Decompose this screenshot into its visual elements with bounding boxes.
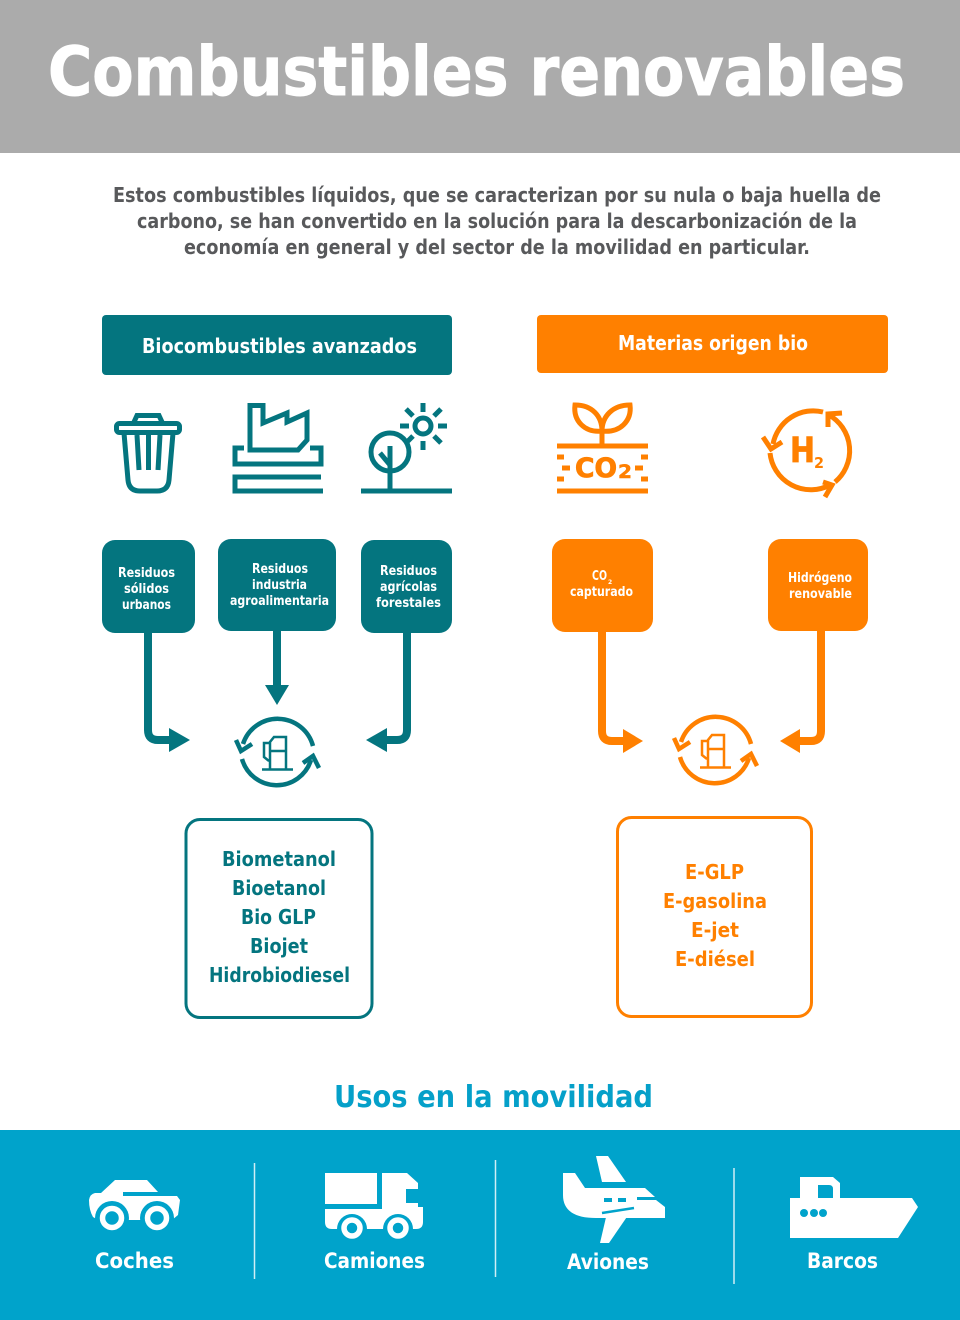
heading: materias origen bio: Materias origen bio bbox=[618, 331, 808, 355]
box: residuos agricolas forestales: agrícolas bbox=[380, 579, 437, 595]
box: biofuels list: Hidrobiodiesel bbox=[209, 963, 350, 987]
box: e-fuels list bbox=[618, 818, 812, 1016]
box: residuos industria agroalimentaria: industria bbox=[252, 577, 307, 593]
icon: car bbox=[89, 1180, 181, 1239]
box: residuos industria agroalimentaria: agroalimentaria bbox=[230, 593, 329, 609]
box: residuos industria agroalimentaria bbox=[218, 539, 336, 631]
box: biofuels list: Biojet bbox=[250, 934, 308, 958]
box: e-fuels list: E-diésel bbox=[675, 947, 755, 971]
arrow: CO2 to pump bbox=[602, 632, 643, 753]
box: biofuels list bbox=[186, 820, 372, 1018]
icon: truck bbox=[325, 1173, 423, 1244]
icon: H2 cycle: H bbox=[790, 431, 815, 471]
box: residuos agricolas forestales bbox=[361, 540, 452, 633]
box: residuos solidos urbanos: urbanos bbox=[122, 597, 171, 613]
label: barcos: Barcos bbox=[807, 1249, 878, 1273]
icon: tree and sun bbox=[361, 403, 452, 491]
icon: H2 cycle bbox=[763, 411, 850, 497]
intro paragraph: Estos combustibles líquidos, que se caracterizan por su nula o baja huella de bbox=[113, 183, 881, 207]
icon: CO2 plant: 2 bbox=[618, 461, 632, 483]
intro paragraph: carbono, se han convertido en la solución para la descarbonización de la bbox=[137, 209, 857, 233]
label: aviones: Aviones bbox=[567, 1250, 649, 1274]
box: hidrogeno renovable: Hidrógeno bbox=[788, 571, 852, 586]
box: residuos industria agroalimentaria: Residuos bbox=[252, 561, 308, 577]
box: residuos agricolas forestales: Residuos bbox=[380, 563, 437, 579]
heading: materias origen bio bbox=[537, 315, 888, 373]
intro paragraph: economía en general y del sector de la movilidad en particular. bbox=[184, 235, 810, 259]
icon: H2 cycle: 2 bbox=[814, 454, 824, 472]
box: biofuels list: Biometanol bbox=[222, 847, 336, 871]
box: e-fuels list: E-GLP bbox=[685, 860, 744, 884]
icon: trash can bbox=[116, 416, 180, 491]
icon: CO2 plant bbox=[557, 405, 648, 491]
panel: biocombustibles avanzados bbox=[102, 315, 452, 1018]
icon: CO2 plant: CO bbox=[575, 453, 617, 484]
label: coches: Coches bbox=[95, 1249, 174, 1273]
box: CO2 capturado bbox=[552, 539, 653, 632]
box: CO2 capturado: capturado bbox=[570, 585, 633, 600]
box: hidrogeno renovable: renovable bbox=[789, 587, 852, 602]
box: e-fuels list: E-jet bbox=[691, 918, 739, 942]
arrow: left to pump bbox=[148, 633, 190, 752]
box: CO2 capturado: 2 bbox=[608, 579, 612, 586]
icon: boat bbox=[790, 1177, 918, 1238]
header banner bbox=[0, 0, 960, 153]
heading: usos en la movilidad: Usos en la movilidad bbox=[334, 1080, 653, 1115]
box: residuos solidos urbanos: Residuos bbox=[118, 565, 175, 581]
box: e-fuels list: E-gasolina bbox=[663, 889, 767, 913]
arrow: hydrogen to pump bbox=[780, 631, 821, 753]
panel: mobility uses band bbox=[0, 1130, 960, 1320]
box: CO2 capturado: CO bbox=[592, 569, 607, 584]
box: residuos solidos urbanos: sólidos bbox=[124, 581, 169, 597]
box: biofuels list: Bio GLP bbox=[241, 905, 316, 929]
icon: fuel pump cycle teal bbox=[236, 719, 319, 785]
intro paragraph bbox=[113, 183, 881, 259]
heading: biocombustibles avanzados bbox=[102, 315, 452, 375]
arrow: centre to pump bbox=[265, 631, 289, 705]
icon: plane bbox=[563, 1156, 665, 1243]
box: residuos solidos urbanos bbox=[102, 540, 195, 633]
label: camiones: Camiones bbox=[324, 1249, 425, 1273]
icon: factory waste bbox=[235, 406, 323, 491]
box: residuos agricolas forestales: forestales bbox=[376, 595, 441, 611]
panel: materias origen bio bbox=[537, 315, 888, 1016]
icon: fuel pump cycle orange bbox=[674, 717, 757, 783]
box: biofuels list: Bioetanol bbox=[232, 876, 326, 900]
box: hidrogeno renovable bbox=[768, 539, 868, 631]
arrow: right to pump bbox=[366, 633, 407, 752]
heading: biocombustibles avanzados: Biocombustibles avanzados bbox=[142, 334, 417, 358]
